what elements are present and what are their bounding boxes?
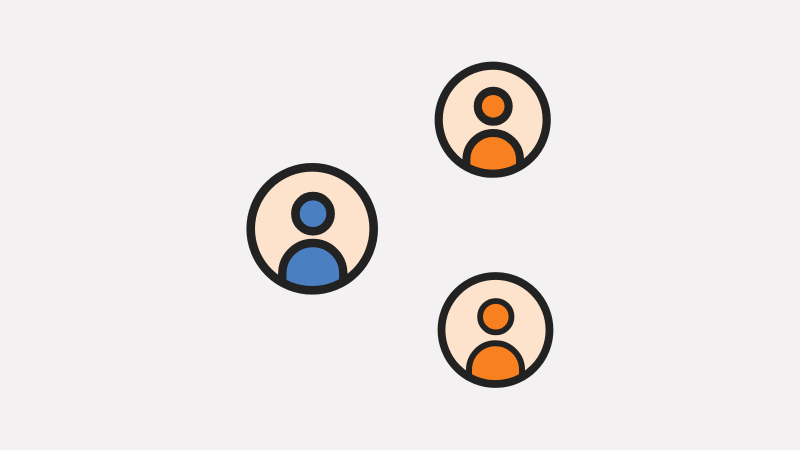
blue user ring (251, 167, 374, 290)
icon: orange user bottom (442, 276, 550, 400)
top user body (462, 129, 524, 170)
bottom user ring (442, 276, 550, 384)
icon: orange user top (439, 66, 547, 190)
bottom user body (466, 340, 525, 380)
icon: blue user (251, 167, 374, 300)
blue user head (295, 196, 331, 231)
blue user body (282, 243, 343, 300)
top user ring (439, 66, 547, 174)
top user head (478, 91, 509, 122)
bottom user head (480, 301, 511, 332)
